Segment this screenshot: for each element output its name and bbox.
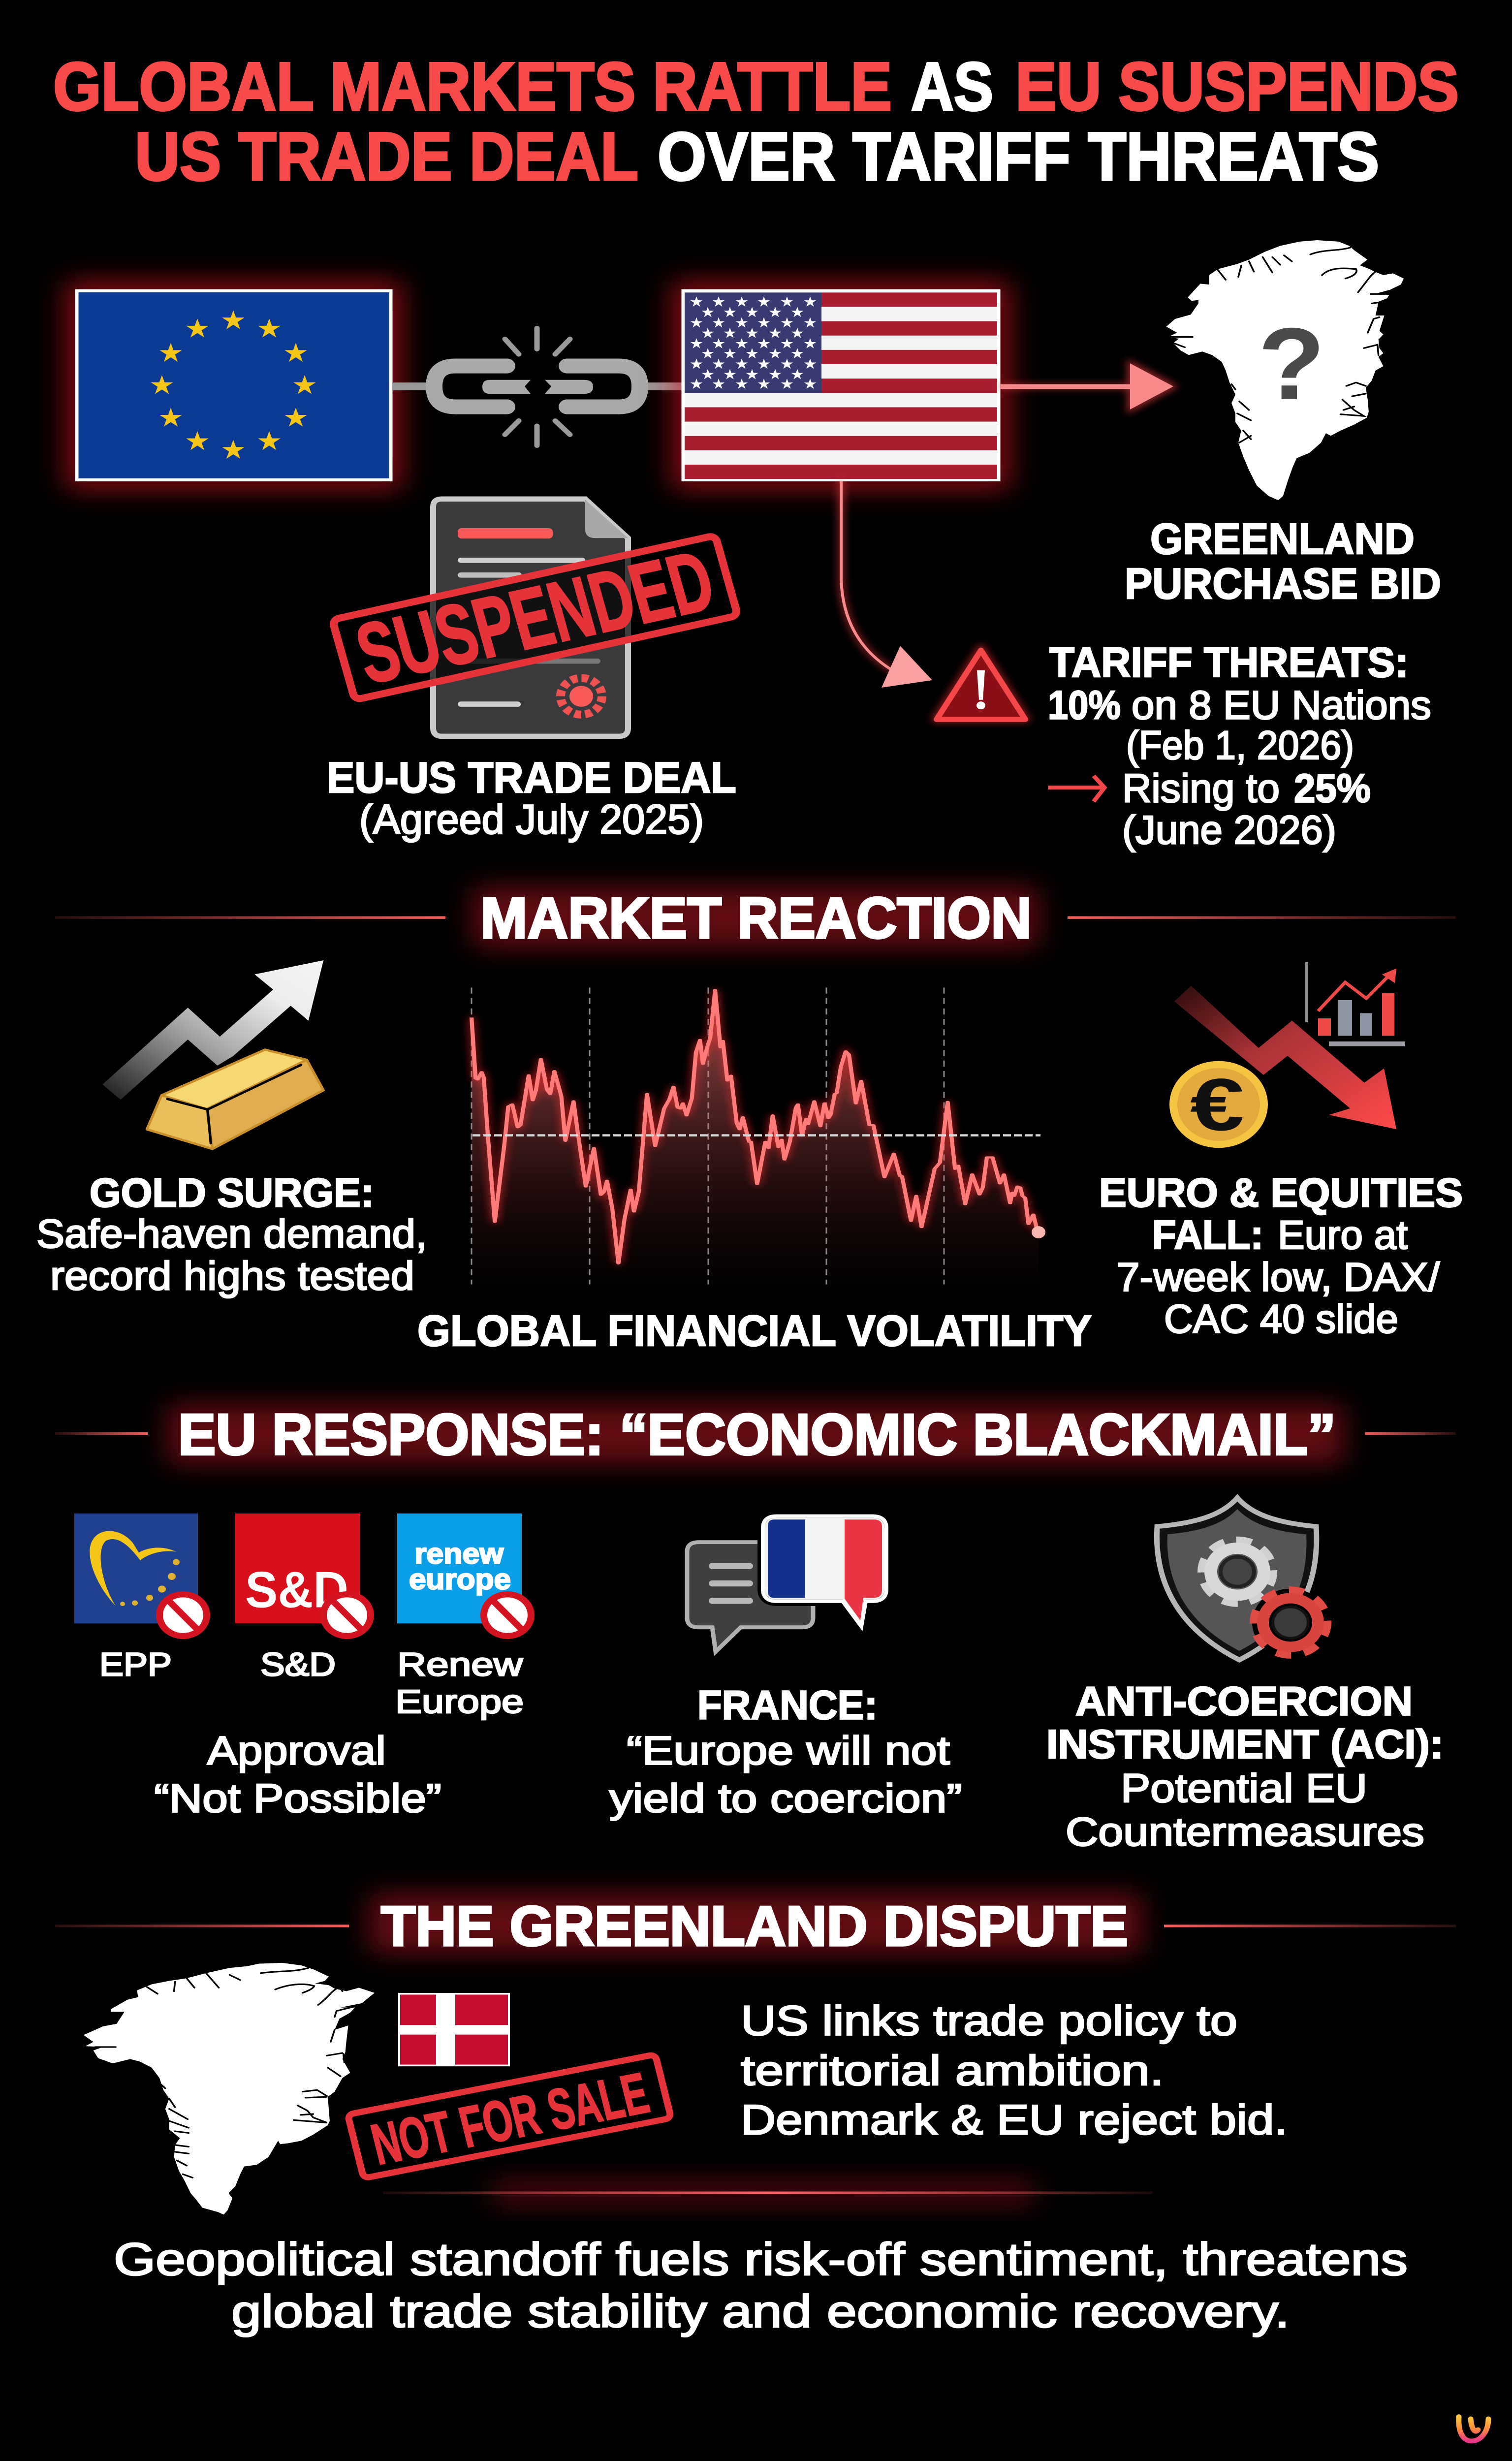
- text: tariff threats: 25%: [1294, 766, 1371, 811]
- arrow: US to Greenland: [1000, 363, 1173, 410]
- text: gold surge: Safe-haven demand,: [36, 1211, 427, 1256]
- label: Greenland purchase bid: PURCHASE BID: [1125, 559, 1441, 608]
- text: anti-coercion instrument: INSTRUMENT (ACI):: [1046, 1721, 1444, 1767]
- text: tariff threats: 10%: [1048, 683, 1121, 727]
- icon: US flag: [672, 281, 1010, 490]
- icon: Greenland with question mark: [1166, 240, 1404, 500]
- panel: Greenland dispute: [55, 1893, 1456, 2337]
- text: France quote: yield to coercion”: [609, 1776, 962, 1821]
- text: dispute description: territorial ambition.: [741, 2047, 1164, 2094]
- title: [53, 49, 1459, 195]
- panel: deal overview: [65, 240, 1441, 852]
- text: tariff threats: (Feb 1, 2026): [1126, 723, 1354, 768]
- text: approval not possible: “Not Possible”: [154, 1776, 441, 1821]
- title: US TRADE DEAL: [135, 119, 638, 195]
- stamp: suspended: SUSPENDED: [346, 532, 724, 701]
- stamp: not for sale: [347, 2054, 672, 2180]
- labels: parliamentary groups: Renew: [397, 1646, 523, 1683]
- label: Greenland purchase bid: [1125, 514, 1441, 608]
- text: anti-coercion instrument: Countermeasures: [1066, 1810, 1424, 1854]
- labels: parliamentary groups: EPP: [99, 1646, 172, 1683]
- title: AS: [911, 49, 993, 125]
- text: dispute description: Denmark & EU reject bid.: [741, 2096, 1288, 2144]
- arrow: US to tariff threats: [841, 481, 932, 688]
- panel: market reaction: [36, 885, 1463, 1355]
- divider glow: [383, 2180, 1152, 2206]
- text: tariff threats: on 8 EU Nations: [1132, 683, 1431, 727]
- icon: Renew Europe logo blocked: europe: [409, 1564, 511, 1596]
- icon: EU flag: [65, 281, 402, 490]
- text: approval not possible: [154, 1728, 441, 1821]
- icon: warning triangle: [935, 648, 1027, 719]
- icon: falling euro and equities: €: [1190, 1063, 1244, 1146]
- label: EU-US trade deal: EU-US TRADE DEAL: [327, 753, 736, 802]
- icon: falling euro and equities: [1173, 962, 1405, 1146]
- text: euro and equities fall: CAC 40 slide: [1164, 1297, 1398, 1341]
- labels: parliamentary groups: [99, 1646, 524, 1720]
- icon: S&D logo blocked: S&D: [245, 1561, 348, 1618]
- icon: S&D logo blocked: [235, 1514, 371, 1636]
- text: gold surge: record highs tested: [50, 1254, 414, 1298]
- label: Greenland purchase bid: GREENLAND: [1150, 514, 1415, 563]
- text: tariff threats: (June 2026): [1122, 808, 1336, 852]
- heading: market reaction: [55, 885, 1456, 950]
- text: conclusion: Geopolitical standoff fuels risk-off sentiment, threatens: [114, 2234, 1408, 2285]
- heading: Greenland dispute: THE GREENLAND DISPUTE: [381, 1895, 1128, 1957]
- text: gold surge: [36, 1170, 427, 1298]
- label: global financial volatility: GLOBAL FINANCIAL VOLATILITY: [417, 1306, 1092, 1355]
- icon: Greenland with question mark: ?: [1258, 307, 1325, 421]
- text: France quote: [609, 1682, 962, 1821]
- text: euro and equities fall: EURO & EQUITIES: [1099, 1170, 1463, 1215]
- labels: parliamentary groups: Europe: [395, 1683, 524, 1720]
- stamp: not for sale: NOT FOR SALE: [365, 2061, 655, 2177]
- label: EU-US trade deal: (Agreed July 2025): [359, 796, 704, 843]
- text: euro and equities fall: 7-week low, DAX/: [1117, 1255, 1440, 1300]
- text: tariff threats: [1048, 639, 1431, 852]
- text: conclusion: global trade stability and economic recovery.: [231, 2286, 1290, 2337]
- stamp: suspended: [330, 529, 739, 705]
- icon: France speech bubbles: [687, 1516, 886, 1652]
- icon: shield with gears: [1157, 1498, 1329, 1660]
- icon: Renew Europe logo blocked: [397, 1514, 531, 1636]
- icon: Danish flag: [399, 1994, 509, 2065]
- icon: Renew Europe logo blocked: renew: [414, 1538, 504, 1570]
- text: conclusion: [114, 2234, 1408, 2337]
- text: approval not possible: Approval: [207, 1728, 386, 1773]
- text: dispute description: [741, 1997, 1288, 2144]
- icon: EPP logo blocked: [74, 1514, 207, 1636]
- text: tariff threats: Rising to: [1122, 766, 1280, 811]
- text: dispute description: US links trade policy to: [741, 1997, 1237, 2044]
- icon: watermark logo: [1459, 2417, 1488, 2441]
- heading: market reaction: MARKET REACTION: [480, 885, 1032, 950]
- panel: EU response: [55, 1402, 1456, 1854]
- text: anti-coercion instrument: ANTI-COERCION: [1075, 1678, 1413, 1724]
- icon: gold bar with rising arrow: [102, 960, 323, 1149]
- text: tariff threats: TARIFF THREATS:: [1049, 639, 1409, 686]
- icon: trade deal document: [433, 499, 628, 736]
- text: France quote: FRANCE:: [697, 1682, 878, 1728]
- heading: Greenland dispute: [55, 1893, 1456, 1957]
- chart: global financial volatility: [472, 987, 1045, 1285]
- label: EU-US trade deal: [327, 753, 736, 843]
- text: anti-coercion instrument: Potential EU: [1121, 1766, 1367, 1811]
- text: euro and equities fall: [1099, 1170, 1463, 1341]
- text: euro and equities fall: FALL:: [1152, 1212, 1263, 1258]
- labels: parliamentary groups: S&D: [260, 1646, 336, 1683]
- icon: broken chain: [392, 328, 682, 445]
- heading: EU response: EU RESPONSE: “ECONOMIC BLACKMAIL”: [178, 1402, 1336, 1467]
- text: gold surge: GOLD SURGE:: [90, 1170, 374, 1215]
- icon: Greenland silhouette: [84, 1963, 375, 2214]
- text: euro and equities fall: Euro at: [1278, 1213, 1408, 1258]
- text: France quote: “Europe will not: [627, 1728, 950, 1773]
- title: GLOBAL MARKETS RATTLE: [53, 49, 892, 125]
- text: anti-coercion instrument: [1046, 1678, 1444, 1854]
